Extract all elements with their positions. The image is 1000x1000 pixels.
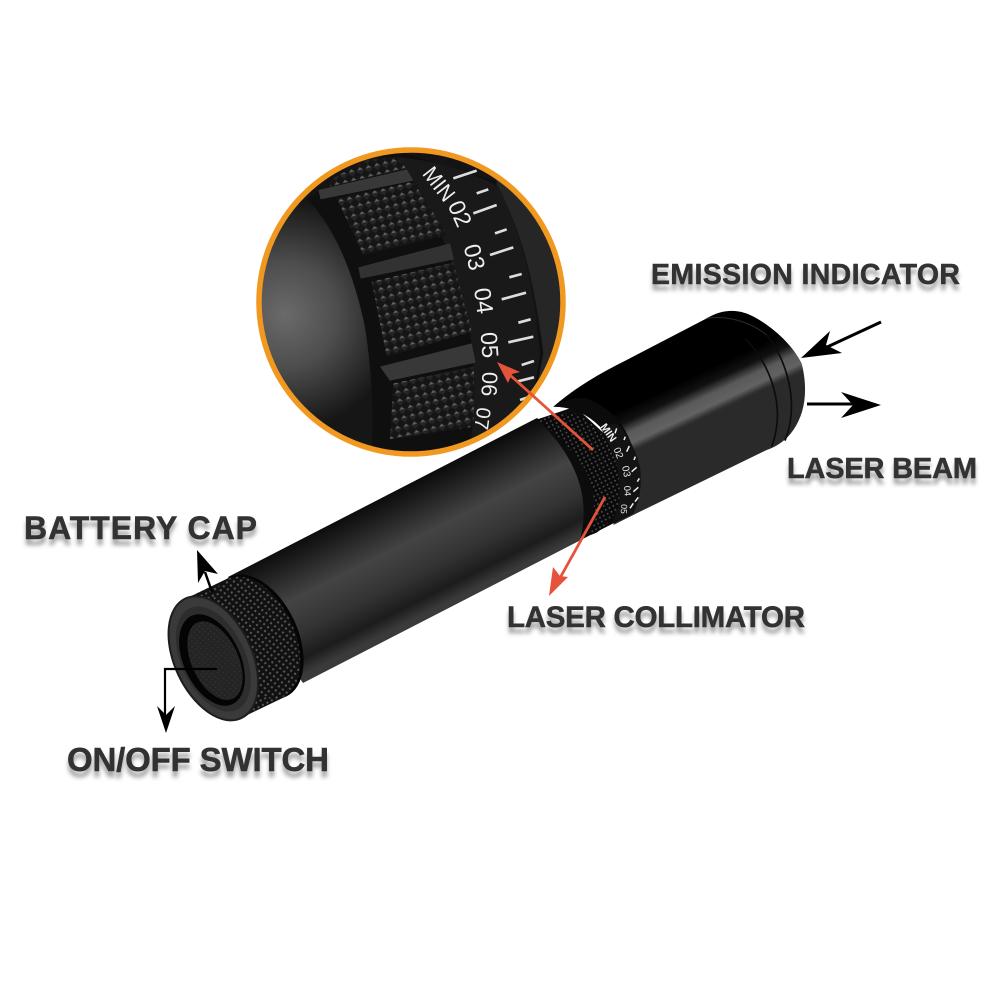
orange ring: [259, 150, 563, 454]
dial numbers: [418, 162, 534, 431]
dial numbers: 03: [459, 241, 490, 273]
arrow: on/off switch: [157, 669, 217, 733]
circle base fill: [306, 152, 543, 412]
dial numbers: MIN: [418, 162, 459, 206]
collimator underlay: [537, 407, 640, 540]
dial numbers and ticks: [598, 422, 639, 514]
outer dial band: [496, 180, 560, 380]
label: on/off switch: ON/OFF SWITCH: [67, 741, 329, 778]
dial numbers and ticks: 04: [622, 485, 633, 497]
cap rim: [150, 582, 276, 734]
collimator dial band: [553, 398, 639, 523]
arrow: emission indicator: [801, 322, 881, 358]
dial numbers and ticks: 05: [619, 504, 629, 514]
dial numbers: 05: [476, 331, 503, 359]
label: laser beam: LASER BEAM: [787, 453, 977, 485]
red arrow: to laser collimator label: [549, 497, 605, 596]
dial numbers and ticks: 03: [619, 465, 632, 479]
dial numbers: 04: [469, 286, 498, 315]
cap knurled ring: [186, 560, 322, 718]
dial numbers and ticks: MIN: [598, 422, 619, 444]
dial numbers: 02: [443, 196, 477, 231]
front head: [537, 311, 805, 540]
zoomed tube: [262, 208, 371, 418]
arrow: battery cap: [197, 550, 218, 592]
dial knurl ring: [537, 413, 620, 535]
cap inner recess: [166, 604, 258, 716]
knurled sections: [330, 157, 406, 187]
lower tube: [228, 418, 610, 683]
label: emission indicator: EMISSION INDICATOR: [651, 259, 960, 291]
dial numbers: 07: [469, 406, 494, 431]
on/off button: [176, 613, 254, 709]
barrel groove lines: [745, 338, 777, 447]
label: battery cap: BATTERY CAP: [24, 510, 257, 546]
arrow: laser beam: [807, 392, 881, 418]
dial numbers and ticks: 02: [611, 446, 625, 461]
head barrel: [553, 311, 805, 525]
label: laser collimator: LASER COLLIMATOR: [507, 601, 805, 634]
raised ridges: [318, 169, 413, 199]
laser device body: [150, 311, 805, 734]
battery cap: [150, 560, 322, 734]
magnified dial circle: [250, 140, 583, 460]
dark knob base: [314, 206, 368, 346]
dial ticks: [453, 171, 534, 400]
red arrow: to magnified dial: [497, 362, 593, 450]
dial numbers: 06: [476, 371, 502, 397]
